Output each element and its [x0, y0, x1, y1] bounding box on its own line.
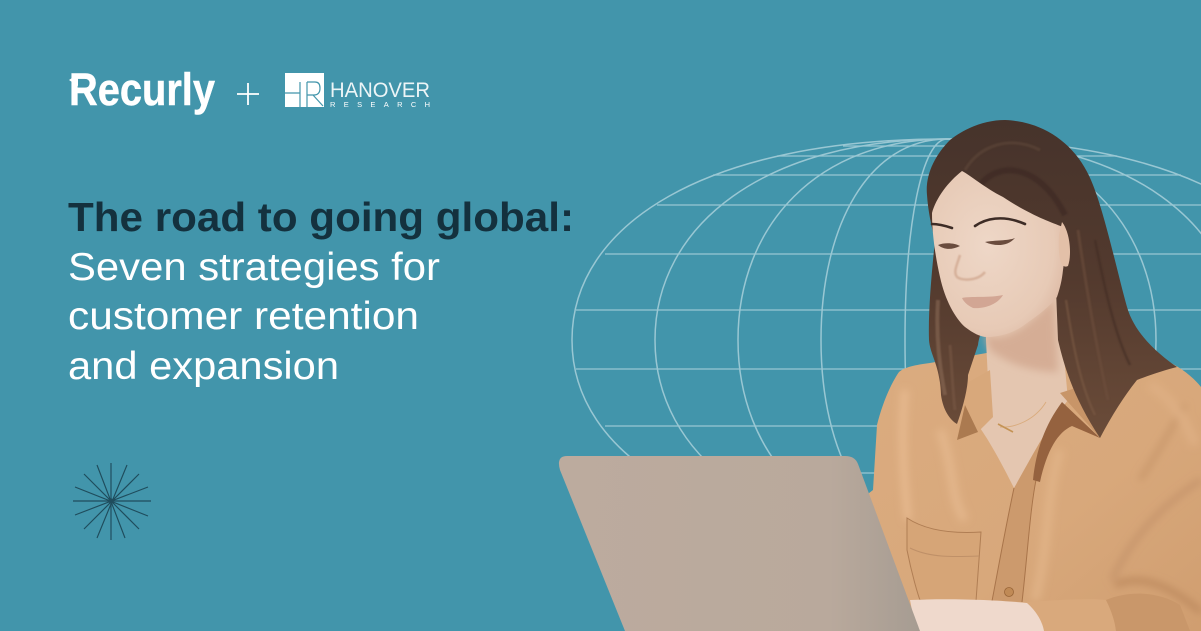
collar left — [957, 370, 993, 440]
hanover research logo — [285, 73, 430, 109]
logo arrow notch — [69, 74, 78, 86]
lips — [962, 295, 1003, 308]
nose shadow — [955, 255, 985, 280]
placket — [992, 400, 1066, 602]
title: Seven strategies for — [68, 246, 440, 289]
hanover research logo: RESEARCH — [330, 100, 430, 109]
pocket — [907, 518, 981, 601]
title: and expansion — [68, 345, 339, 388]
title: The road to going global: — [68, 194, 574, 240]
globe wireframe — [572, 139, 1201, 541]
recurly logo: Recurly — [69, 64, 215, 115]
cuff — [1104, 624, 1116, 631]
eyes — [938, 238, 1015, 249]
photo: woman at laptop — [559, 120, 1201, 631]
shirt — [860, 340, 1201, 631]
laptop — [559, 456, 920, 631]
face — [932, 171, 1064, 337]
hair strands — [937, 143, 1130, 415]
hanover research logo: HANOVER — [330, 79, 430, 102]
eyebrows — [932, 218, 1025, 228]
necklace — [1000, 402, 1046, 427]
button — [1004, 588, 1014, 596]
neck and chest — [980, 290, 1068, 488]
hand — [910, 599, 1044, 631]
collar right — [1060, 385, 1115, 438]
collar left shadow — [957, 405, 978, 440]
title: customer retention — [68, 295, 419, 338]
neck shadow — [984, 298, 1058, 372]
ear — [1059, 222, 1070, 267]
hair back — [927, 120, 1177, 438]
collar dark inner — [1033, 402, 1100, 482]
plus sign — [237, 83, 259, 105]
shirt folds — [903, 385, 1201, 612]
title — [68, 194, 574, 388]
icon: starburst — [73, 463, 151, 540]
